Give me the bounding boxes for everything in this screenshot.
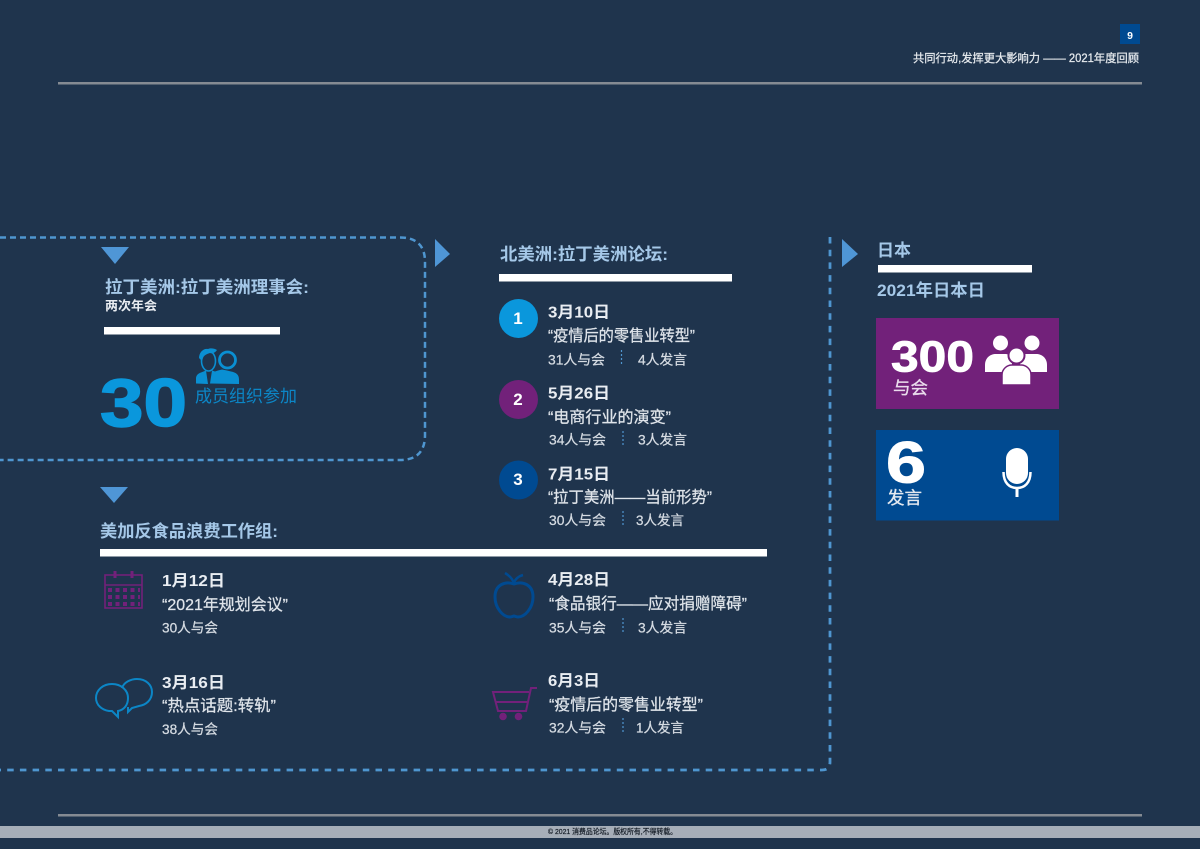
event 1: “疫情后的零售业转型” (548, 327, 695, 345)
subheading: 2021年日本日 (877, 280, 985, 300)
heading: 日本 (877, 241, 911, 260)
label: 成员组织参加 (195, 387, 297, 406)
event 2: 5月26日 (548, 386, 610, 402)
event 1: 4人发言 (638, 352, 687, 368)
stat card: attendees: 与会 (893, 378, 928, 398)
event: Jun 3 (493, 673, 703, 736)
event 2: “电商行业的演变” (548, 408, 671, 426)
event: Jun 3: “疫情后的零售业转型” (549, 696, 703, 714)
icon: calendar (105, 571, 142, 608)
event: Mar 16: 38人与会 (162, 722, 218, 737)
event: Apr 28: 4月28日 (548, 572, 610, 589)
event 2: 2 (513, 390, 523, 409)
event 1: 31人与会 (548, 352, 605, 368)
event 3: 30人与会 (549, 513, 606, 528)
panel: Latin America council (100, 277, 309, 441)
event 1: 3月10日 (548, 304, 610, 322)
subheading: 两次年会 (105, 298, 158, 313)
event: Jun 3: 6月3日 (548, 673, 600, 690)
event: Apr 28 (495, 572, 747, 636)
event 3 (499, 460, 712, 528)
arrow: to Japan (842, 239, 858, 267)
page number badge (1120, 24, 1140, 44)
event 1: 1 (513, 309, 523, 328)
panel: North America forum (499, 244, 732, 528)
icon: two people (196, 348, 239, 384)
dashed connector: North America panel (0, 237, 830, 770)
page header (58, 24, 1142, 84)
arrow: food waste group (100, 487, 128, 503)
icon: speech bubbles (96, 679, 152, 717)
icon: apple (495, 573, 533, 617)
icon: microphone (1004, 448, 1030, 497)
arrow: to North America (435, 239, 450, 267)
event 1 (499, 299, 695, 368)
stat card: attendees: 300 (891, 332, 974, 382)
event: Apr 28: “食品银行——应对捐赠障碍” (549, 594, 747, 613)
event: Jan 12 (105, 571, 288, 636)
event: Apr 28: 3人发言 (638, 620, 687, 636)
event 2 (499, 380, 687, 448)
event: Jan 12: “2021年规划会议” (162, 596, 288, 614)
arrow: Latin America (101, 247, 129, 264)
event: Jun 3: 32人与会 (549, 720, 606, 736)
event: Mar 16 (96, 675, 276, 737)
event: Apr 28: 35人与会 (549, 620, 606, 636)
event: Mar 16: “热点话题:转轨” (162, 697, 276, 715)
heading: 北美洲:拉丁美洲论坛: (500, 244, 668, 264)
icon: group (985, 336, 1047, 385)
heading: 美加反食品浪费工作组: (100, 521, 278, 541)
stat card: attendees (876, 318, 1059, 409)
stat card: speakers: 6 (886, 430, 926, 496)
page number badge: 9 (1127, 30, 1133, 42)
event 3: 7月15日 (548, 466, 610, 484)
event 3: “拉丁美洲——当前形势” (548, 488, 712, 506)
panel: Japan (876, 241, 1059, 520)
event: Jun 3: 1人发言 (636, 720, 684, 736)
event 2: 3人发言 (638, 432, 687, 448)
big number: 30 (100, 365, 187, 441)
stat card: speakers: 发言 (887, 488, 922, 508)
event 2: 34人与会 (549, 432, 606, 448)
stat card: speakers (876, 430, 1059, 520)
copyright: © 2021 消费品论坛。版权所有,不得转载。 (548, 826, 677, 836)
header title: 共同行动,发挥更大影响力 —— 2021年度回顾 (913, 51, 1139, 65)
panel: food waste working group (96, 521, 767, 737)
event: Jan 12: 30人与会 (162, 620, 218, 636)
event: Mar 16: 3月16日 (162, 675, 225, 692)
event 3: 3 (513, 470, 523, 489)
event: Jan 12: 1月12日 (162, 573, 225, 590)
dashed connector: Latin America box (0, 238, 425, 460)
event 3: 3人发言 (636, 513, 684, 528)
heading: 拉丁美洲:拉丁美洲理事会: (105, 277, 309, 297)
icon: shopping cart (493, 688, 537, 719)
footer (0, 814, 1200, 838)
